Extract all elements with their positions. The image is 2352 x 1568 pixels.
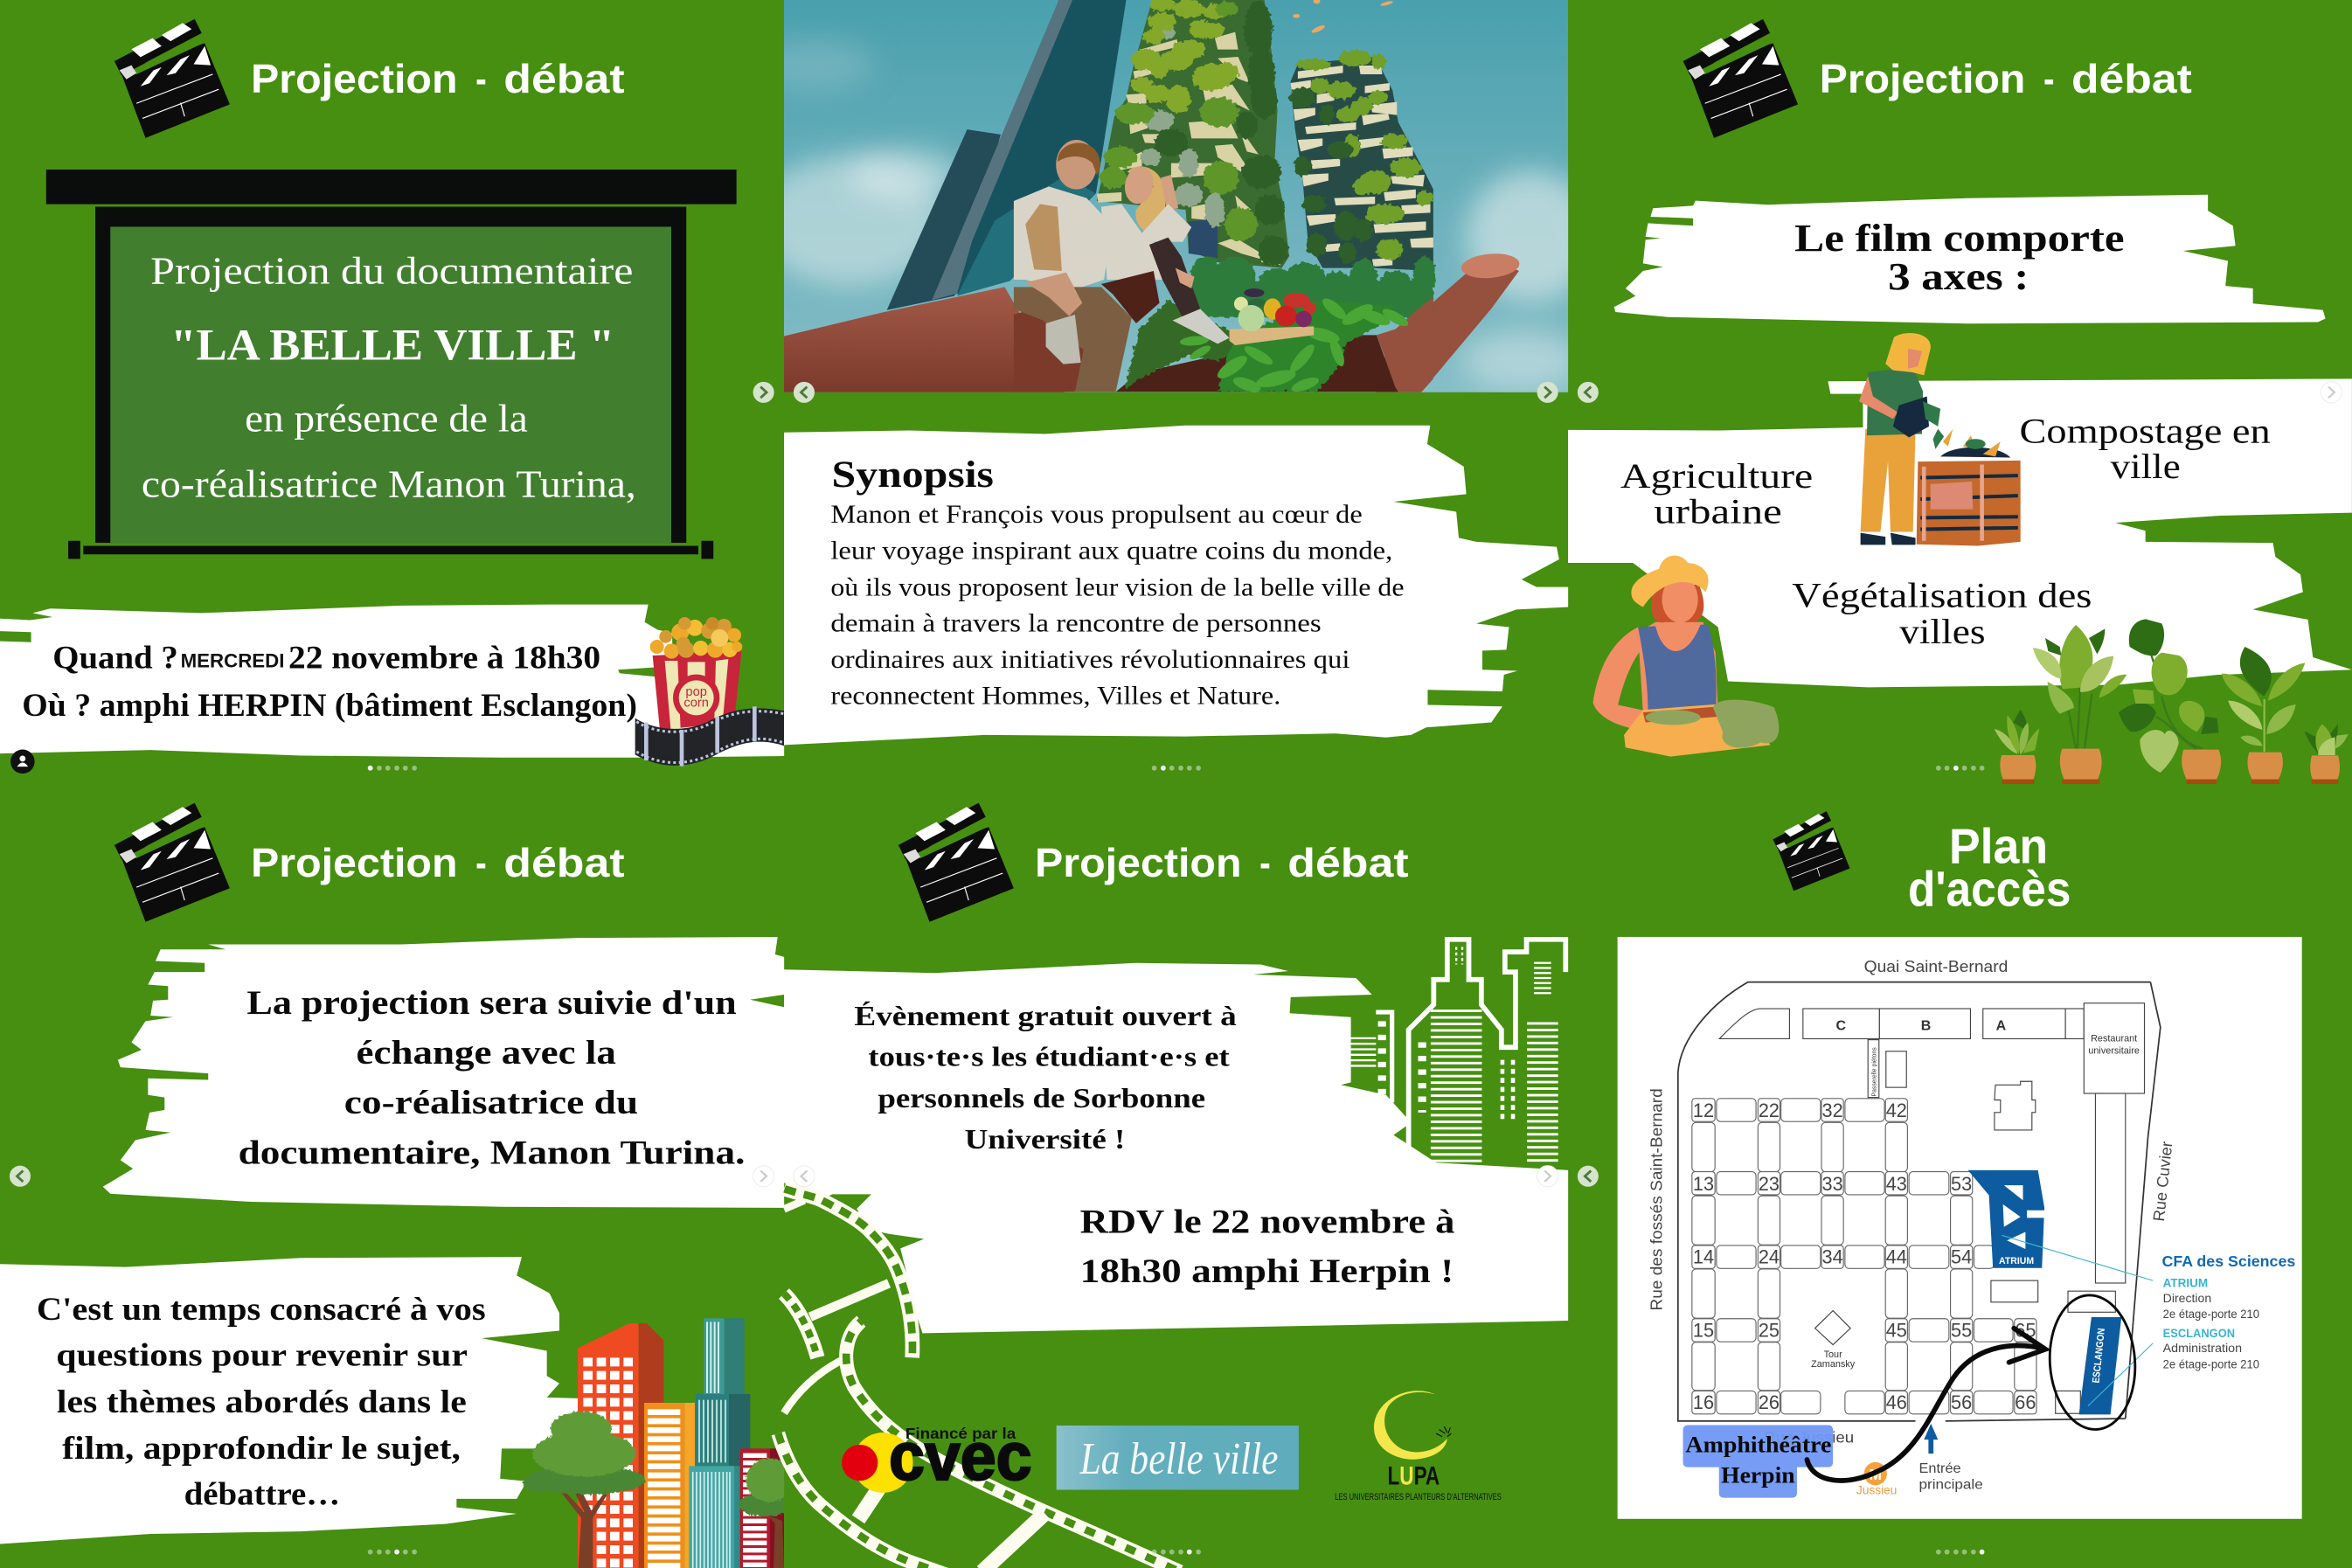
icon: popcorn and film strip: pop <box>685 685 707 699</box>
brush band: when and where <box>0 605 784 758</box>
building numbers: 45 <box>1886 1319 1907 1341</box>
legend: CFA des Sciences <box>2162 1252 2295 1371</box>
illustration: city buildings and trees <box>523 1318 793 1568</box>
text: when and where: Où ? amphi HERPIN (bâtiment Esclangon) <box>22 687 637 723</box>
text: when and where <box>22 640 637 723</box>
icon: clapperboard <box>1773 811 1850 891</box>
arrow: next <box>753 1166 774 1187</box>
building numbers: 15 <box>1693 1319 1714 1341</box>
building numbers: 33 <box>1821 1173 1843 1195</box>
campus blocks <box>1719 1003 2145 1413</box>
projection screen: en présence de la <box>245 397 528 441</box>
text: synopsis: leur voyage inspirant aux quatre coins du monde, <box>830 537 1392 565</box>
building numbers: 22 <box>1759 1100 1780 1121</box>
heading: Projection - débat <box>251 56 625 101</box>
projection screen <box>46 170 737 559</box>
map labels: Rue des fossés Saint-Bernard <box>1648 1088 1667 1311</box>
arrow: previous <box>1578 382 1599 403</box>
building numbers: 66 <box>2015 1391 2036 1413</box>
building numbers: 13 <box>1693 1173 1714 1195</box>
text: the film has 3 axes <box>1794 216 2125 298</box>
logo: La belle ville: La belle ville <box>1079 1434 1278 1484</box>
dark hand under foliage <box>1116 335 1398 392</box>
text: questions: les thèmes abordés dans le <box>57 1384 467 1419</box>
map labels: Rue Cuvier <box>2149 1141 2175 1222</box>
callout: Amphithéâtre Herpin: Amphithéâtre <box>1685 1432 1832 1457</box>
legend: CFA des Sciences: ATRIUM <box>2163 1277 2208 1290</box>
text: free event: Évènement gratuit ouvert à <box>854 1000 1237 1031</box>
carousel dots <box>1936 766 1984 771</box>
illustration: film strip <box>778 1189 1180 1568</box>
carousel dots <box>368 766 417 771</box>
carousel dots <box>368 1550 417 1555</box>
text: rendez-vous: RDV le 22 novembre à <box>1080 1204 1454 1241</box>
brush: discussion <box>103 937 784 1208</box>
panel: screening announcement <box>0 19 784 774</box>
arrow: previous <box>794 382 815 403</box>
building: Esclangon: ESCLANGON <box>2092 1328 2107 1384</box>
icon: profile badge <box>10 750 35 774</box>
text: free event: Université ! <box>965 1123 1125 1155</box>
arrow: next <box>1537 1166 1558 1187</box>
heading: Plan d'accès: d'accès <box>1908 861 2071 916</box>
building numbers: 12 <box>1693 1100 1714 1121</box>
map labels: universitaire <box>2088 1046 2140 1057</box>
building: Atrium <box>1968 1170 2044 1268</box>
foreground foliage mass <box>1218 300 1392 392</box>
text: free event: tous·te·s les étudiant·e·s et <box>868 1040 1230 1072</box>
legend: CFA des Sciences: ESCLANGON <box>2163 1327 2235 1340</box>
arrow: previous <box>10 1166 31 1187</box>
vegetable crate <box>1230 288 1316 345</box>
text: synopsis: reconnectent Hommes, Villes et Nature. <box>830 682 1280 710</box>
projection screen: co-réalisatrice Manon Turina, <box>142 461 636 505</box>
icon: clapperboard <box>1683 19 1798 138</box>
text: questions: film, approfondir le sujet, <box>62 1430 461 1466</box>
main entrance <box>1919 1424 1983 1492</box>
legend: CFA des Sciences: 2e étage-porte 210 <box>2163 1358 2259 1371</box>
illustration: farmer with crate <box>1593 556 1779 757</box>
building numbers: 24 <box>1759 1246 1780 1268</box>
logo: La belle ville <box>1057 1426 1299 1489</box>
icon: clapperboard <box>114 803 230 922</box>
building: Atrium: ATRIUM <box>1999 1256 2034 1266</box>
falling leaves <box>1293 0 1393 34</box>
text: synopsis: Manon et François vous propulsent au cœur de <box>830 501 1363 529</box>
projection screen: "LA BELLE VILLE " <box>170 321 614 370</box>
icon: metro Jussieu <box>1856 1462 1897 1497</box>
tower 1 <box>1097 0 1289 268</box>
map labels: B <box>1921 1018 1931 1034</box>
heading: Plan d'accès <box>1908 818 2071 916</box>
callout: Amphithéâtre Herpin <box>1683 1425 1833 1498</box>
text: axes: Végétalisation des <box>1792 575 2092 615</box>
icon: popcorn and film strip: corn <box>683 696 709 710</box>
text: questions: questions pour revenir sur <box>56 1337 468 1373</box>
carousel dots <box>1152 1550 1201 1555</box>
icon: metro Jussieu: M <box>1870 1466 1882 1483</box>
arrow: next <box>2321 382 2342 403</box>
illustration: woman composting <box>1859 333 2021 546</box>
text: axes: Compostage en <box>2020 411 2271 450</box>
map labels: Tour <box>1824 1349 1842 1360</box>
text: free event: personnels de Sorbonne <box>878 1082 1205 1114</box>
text: axes: villes <box>1899 612 1986 651</box>
text: when and where: Quand ? <box>52 640 178 676</box>
text: the film has 3 axes: 3 axes : <box>1888 254 2029 298</box>
illustration: white line city <box>1363 940 1565 1168</box>
building numbers: 46 <box>1886 1391 1907 1413</box>
brush: synopsis background <box>784 426 1568 745</box>
logo: LUPA <box>1335 1391 1502 1502</box>
text: discussion: échange avec la <box>357 1034 616 1072</box>
building grid <box>1692 1099 2036 1414</box>
text: rendez-vous <box>1080 1204 1454 1290</box>
brush: axes background <box>1568 378 2352 687</box>
logo: LUPA: LUPA <box>1388 1462 1440 1491</box>
logo: CVEC: cvec <box>889 1419 1032 1495</box>
map labels: C <box>1836 1018 1847 1034</box>
icon: metro Jussieu: Jussieu <box>1856 1484 1897 1497</box>
callout: Amphithéâtre Herpin: Herpin <box>1721 1462 1795 1488</box>
illustration: potted plants <box>1995 619 2349 784</box>
logo: CVEC: Financé par la <box>905 1425 1016 1442</box>
foreground vines <box>1125 299 1234 390</box>
legend: CFA des Sciences: Direction <box>2163 1292 2211 1305</box>
brush: questions <box>0 1257 582 1544</box>
map labels: Zamansky <box>1811 1359 1856 1370</box>
text: axes: urbaine <box>1654 492 1782 531</box>
building numbers: 53 <box>1951 1173 1972 1195</box>
text: questions: débattre… <box>184 1476 340 1512</box>
building numbers: 42 <box>1886 1100 1907 1121</box>
main entrance: Entrée <box>1919 1460 1961 1476</box>
hand-drawn circle around Esclangon <box>2045 1293 2140 1433</box>
building numbers: 56 <box>1951 1391 1972 1413</box>
brush gap <box>0 631 31 642</box>
text: questions: C'est un temps consacré à vos <box>37 1291 486 1327</box>
building numbers: 44 <box>1886 1246 1907 1268</box>
text: synopsis: demain à travers la rencontre de personnes <box>830 610 1322 638</box>
text: synopsis: Synopsis <box>832 454 994 496</box>
tower 2 <box>1291 52 1433 271</box>
legend: CFA des Sciences: 2e étage-porte 210 <box>2163 1308 2259 1321</box>
projection screen: Projection du documentaire <box>150 248 633 292</box>
arrow: to amphitheatre <box>1807 1329 2045 1481</box>
text: discussion <box>239 984 745 1171</box>
map labels <box>1648 957 2175 1447</box>
foreground leaves <box>1179 295 1411 395</box>
text: free event <box>854 1000 1237 1155</box>
text: when and where: 22 novembre à 18h30 <box>288 640 600 676</box>
building numbers: 25 <box>1759 1319 1780 1341</box>
map labels: Restaurant <box>2091 1033 2137 1044</box>
text: rendez-vous: 18h30 amphi Herpin ! <box>1080 1252 1454 1290</box>
heading: Projection - débat <box>1035 840 1409 885</box>
woman <box>1101 163 1230 343</box>
text: when and where: MERCREDI <box>181 649 284 671</box>
brush: event details <box>784 963 1568 1333</box>
arrow: previous <box>1578 1166 1599 1187</box>
icon: clapperboard <box>898 803 1014 922</box>
building numbers: 65 <box>2015 1319 2036 1341</box>
logo: LUPA: LES UNIVERSITAIRES PLANTEURS D'ALTERNATIVES <box>1335 1492 1502 1502</box>
heading: Plan d'accès: Plan <box>1949 818 2048 874</box>
text: axes: ville <box>2111 447 2181 486</box>
photo: couple on a giant hand with green towers <box>754 0 1597 395</box>
text: questions <box>37 1291 486 1512</box>
carousel dots <box>1152 766 1201 771</box>
text: synopsis: où ils vous proposent leur vision de la belle ville de <box>830 573 1404 601</box>
heading: Projection - débat <box>1820 57 2192 101</box>
text: the film has 3 axes: Le film comporte <box>1794 216 2125 260</box>
arrow: previous <box>794 1166 815 1187</box>
legend: CFA des Sciences: Administration <box>2163 1342 2242 1355</box>
panel: discussion after the film <box>0 803 793 1568</box>
carousel dots <box>1936 1550 1984 1555</box>
map labels: Passerelle piétons <box>1871 1047 1877 1096</box>
heading: Projection - débat <box>251 840 625 885</box>
panel: free event and partners <box>778 803 1568 1568</box>
building numbers: 16 <box>1693 1391 1714 1413</box>
building numbers: 32 <box>1821 1100 1843 1121</box>
building numbers: 54 <box>1951 1246 1972 1268</box>
tree line <box>1189 256 1436 317</box>
building numbers: 43 <box>1886 1173 1907 1195</box>
text: axes: Agriculture <box>1620 456 1813 496</box>
main entrance: principale <box>1919 1476 1983 1492</box>
map: campus plan <box>1618 937 2302 1519</box>
building: Esclangon <box>2079 1317 2121 1414</box>
building numbers: 23 <box>1759 1173 1780 1195</box>
map labels: Rue Jussieu <box>1764 1429 1854 1447</box>
text: synopsis <box>830 454 1404 710</box>
arrow: next <box>1537 382 1558 403</box>
legend: CFA des Sciences: CFA des Sciences <box>2162 1252 2295 1270</box>
panel: access map <box>1578 811 2302 1555</box>
text: discussion: co-réalisatrice du <box>344 1084 638 1121</box>
building numbers: 34 <box>1821 1246 1843 1268</box>
arrow: next <box>753 382 774 403</box>
icon: popcorn and film strip <box>635 617 784 767</box>
text: discussion: La projection sera suivie d'un <box>246 984 737 1022</box>
building numbers: 26 <box>1759 1391 1780 1413</box>
text: axes <box>1620 411 2271 651</box>
icon: clapperboard <box>114 19 230 138</box>
text: discussion: documentaire, Manon Turina. <box>239 1134 745 1171</box>
building numbers <box>1693 1100 2036 1413</box>
map labels: Quai Saint-Bernard <box>1864 957 2008 975</box>
man <box>1014 140 1132 392</box>
panel: synopsis <box>754 0 1597 771</box>
building numbers: 14 <box>1693 1246 1714 1268</box>
text: synopsis: ordinaires aux initiatives révolutionnaires qui <box>830 646 1349 674</box>
campus outline <box>1678 982 2161 1421</box>
brush: intro <box>1614 195 2326 323</box>
legend leader lines <box>2002 1235 2153 1406</box>
map labels: A <box>1996 1018 2007 1034</box>
panel: three axes <box>1568 19 2352 784</box>
building numbers: 55 <box>1951 1319 1972 1341</box>
